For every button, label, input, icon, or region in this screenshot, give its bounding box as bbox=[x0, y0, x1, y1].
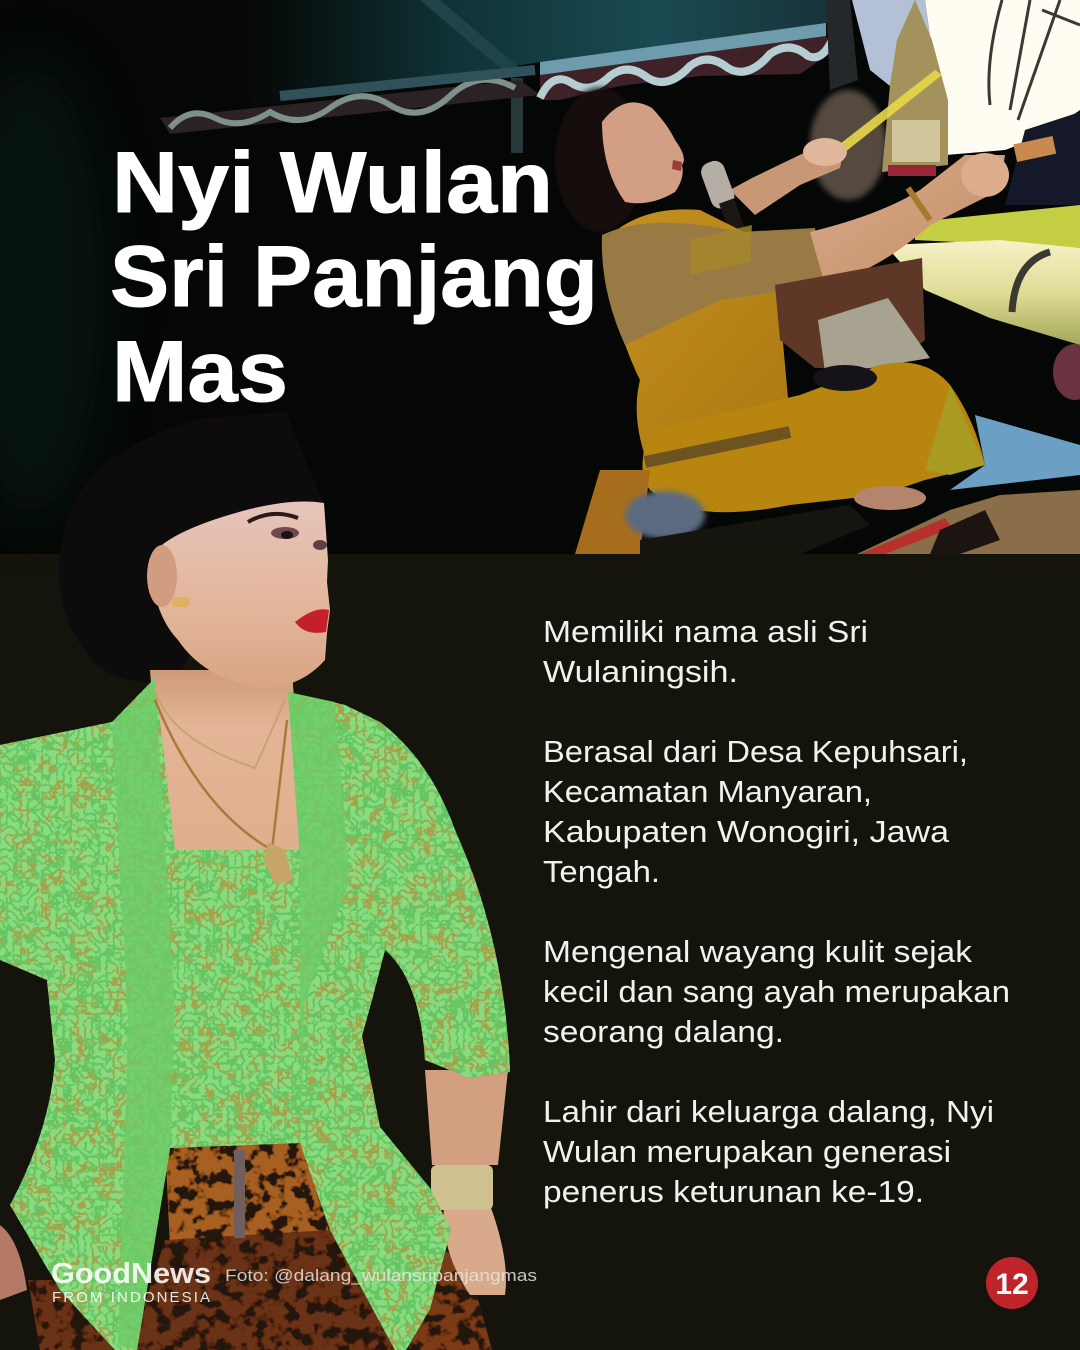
performer: seated dalang in mustard kebaya bbox=[555, 88, 1009, 512]
earring bbox=[172, 597, 190, 607]
paragraph: origin: Kecamatan Manyaran, bbox=[543, 774, 872, 809]
logo: GoodNews from Indonesia: GoodNews bbox=[51, 1258, 211, 1290]
paragraph: family lineage: Lahir dari keluarga dalang, Nyi bbox=[543, 1094, 994, 1129]
photo credit: Foto: @dalang_wulansripanjangmas bbox=[225, 1266, 537, 1285]
batik skirt bbox=[28, 1140, 492, 1350]
blue script paper bbox=[950, 415, 1080, 490]
paragraph: origin bbox=[543, 734, 968, 889]
wayang bush puppet bbox=[810, 90, 886, 200]
paragraph: origin: Kabupaten Wonogiri, Jawa bbox=[543, 814, 950, 849]
skirt zipper bbox=[234, 1150, 245, 1238]
paragraph: real name: Wulaningsih. bbox=[543, 654, 738, 689]
torso bbox=[605, 209, 830, 470]
tent valance bbox=[160, 23, 832, 134]
photo: stage performance background bbox=[0, 0, 1080, 554]
lit wayang screen bbox=[852, 0, 1080, 205]
wayang kayon puppet bbox=[800, 0, 948, 176]
batik sash bbox=[813, 365, 877, 391]
hair and bun bbox=[59, 412, 325, 682]
logo: GoodNews from Indonesia: FROM INDONESIA bbox=[52, 1289, 210, 1306]
biography text bbox=[543, 614, 1010, 1209]
background: dark lower panel bbox=[0, 554, 1080, 1350]
bracelet bbox=[431, 1165, 493, 1210]
banana trunk bbox=[885, 205, 1080, 400]
paragraph: family lineage: Wulan merupakan generasi bbox=[543, 1134, 951, 1169]
lips bbox=[295, 609, 329, 633]
necklace bbox=[155, 690, 293, 885]
kebaya front panel left bbox=[112, 678, 175, 1350]
eyes and brows bbox=[248, 514, 327, 550]
paragraph: real name: Memiliki nama asli Sri bbox=[543, 614, 868, 649]
brown instrument box bbox=[775, 258, 925, 368]
paragraph: origin: Berasal dari Desa Kepuhsari, bbox=[543, 734, 968, 769]
face bbox=[152, 501, 330, 688]
kebaya front panel right bbox=[288, 692, 350, 1143]
paragraph: origin: Tengah. bbox=[543, 854, 660, 889]
neck and chest bbox=[150, 670, 305, 860]
dark tent post bbox=[826, 0, 858, 90]
photo: portrait of Nyi Wulan in green kebaya bbox=[0, 412, 510, 1350]
kebaya lace bbox=[0, 678, 510, 1350]
sheer sleeve bbox=[602, 223, 825, 345]
hair bbox=[555, 88, 645, 232]
paragraph: family lineage: penerus keturunan ke-19. bbox=[543, 1174, 924, 1209]
paragraph: childhood bbox=[543, 934, 1010, 1049]
tent roof bbox=[240, 0, 835, 108]
logo: GoodNews from Indonesia bbox=[51, 1258, 211, 1306]
page number badge: 12 bbox=[995, 1268, 1029, 1301]
paragraph: childhood: kecil dan sang ayah merupakan bbox=[543, 974, 1010, 1009]
title: Sri Panjang bbox=[110, 229, 598, 325]
skirt lap bbox=[642, 362, 985, 512]
hands bbox=[425, 1070, 508, 1165]
upper left arm bbox=[730, 145, 845, 215]
wayang puppets on floor bbox=[575, 470, 1080, 554]
face bbox=[602, 102, 684, 203]
microphone bbox=[698, 158, 745, 234]
forearm bbox=[810, 155, 1005, 285]
title: Nyi Wulan bbox=[112, 135, 553, 231]
title bbox=[110, 135, 598, 420]
foot bbox=[854, 486, 926, 510]
title: Mas bbox=[112, 324, 288, 420]
paragraph: real name bbox=[543, 614, 868, 689]
paragraph: family lineage bbox=[543, 1094, 994, 1209]
page number badge bbox=[986, 1257, 1038, 1309]
paragraph: childhood: Mengenal wayang kulit sejak bbox=[543, 934, 973, 969]
paragraph: childhood: seorang dalang. bbox=[543, 1014, 784, 1049]
